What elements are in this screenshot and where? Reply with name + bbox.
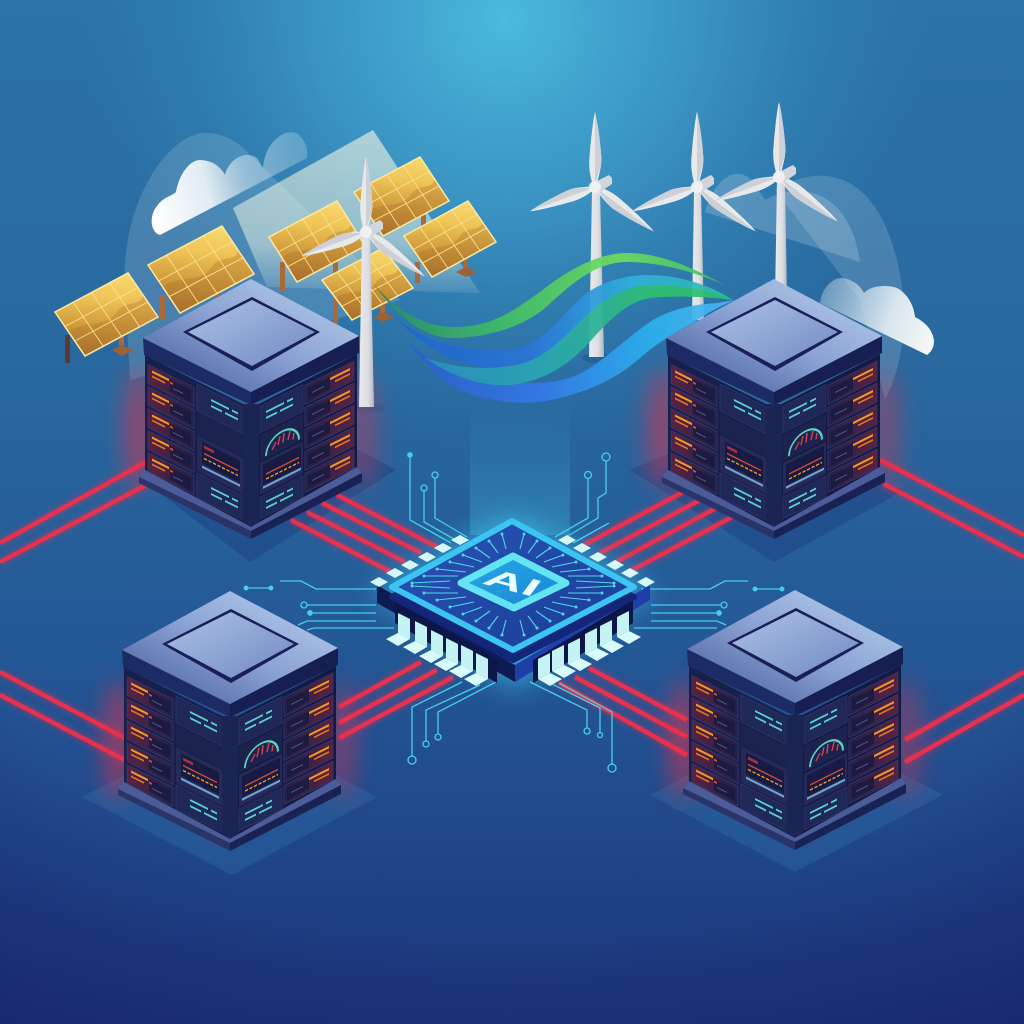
server rack: top left — [125, 279, 377, 539]
AI label: AI — [477, 564, 548, 602]
translucent backdrop shapes — [125, 130, 904, 400]
chip base — [377, 585, 650, 683]
chip glow — [370, 515, 655, 690]
cloud: left — [152, 132, 307, 235]
floor plates — [82, 718, 943, 875]
floor shadows — [140, 440, 905, 562]
chip core — [461, 556, 566, 608]
solar panel 5 — [404, 201, 496, 277]
red power lines — [0, 460, 1024, 762]
stands — [65, 215, 477, 363]
wind turbine rotors — [528, 102, 841, 236]
solar panel 3 — [269, 201, 365, 282]
circuit traces — [244, 453, 784, 772]
solar panel 1 — [55, 273, 158, 356]
solar array — [55, 157, 496, 363]
foreground wind turbine — [299, 157, 428, 407]
AI chip — [370, 515, 655, 690]
server rack: bottom right — [669, 590, 921, 850]
cloud: right — [820, 278, 934, 355]
energy ribbons — [373, 253, 735, 403]
server rack: top right — [648, 279, 900, 539]
wind turbine towers — [352, 180, 787, 413]
solar panel 2 — [148, 226, 254, 313]
central light beam — [470, 400, 570, 535]
chip plate — [392, 521, 634, 660]
lower pins — [386, 611, 641, 686]
upper pins — [370, 535, 655, 587]
server rack: bottom left — [104, 591, 356, 851]
solar panel 4 — [354, 157, 449, 236]
chip traces — [412, 534, 614, 635]
solar panel 6 — [322, 248, 413, 320]
